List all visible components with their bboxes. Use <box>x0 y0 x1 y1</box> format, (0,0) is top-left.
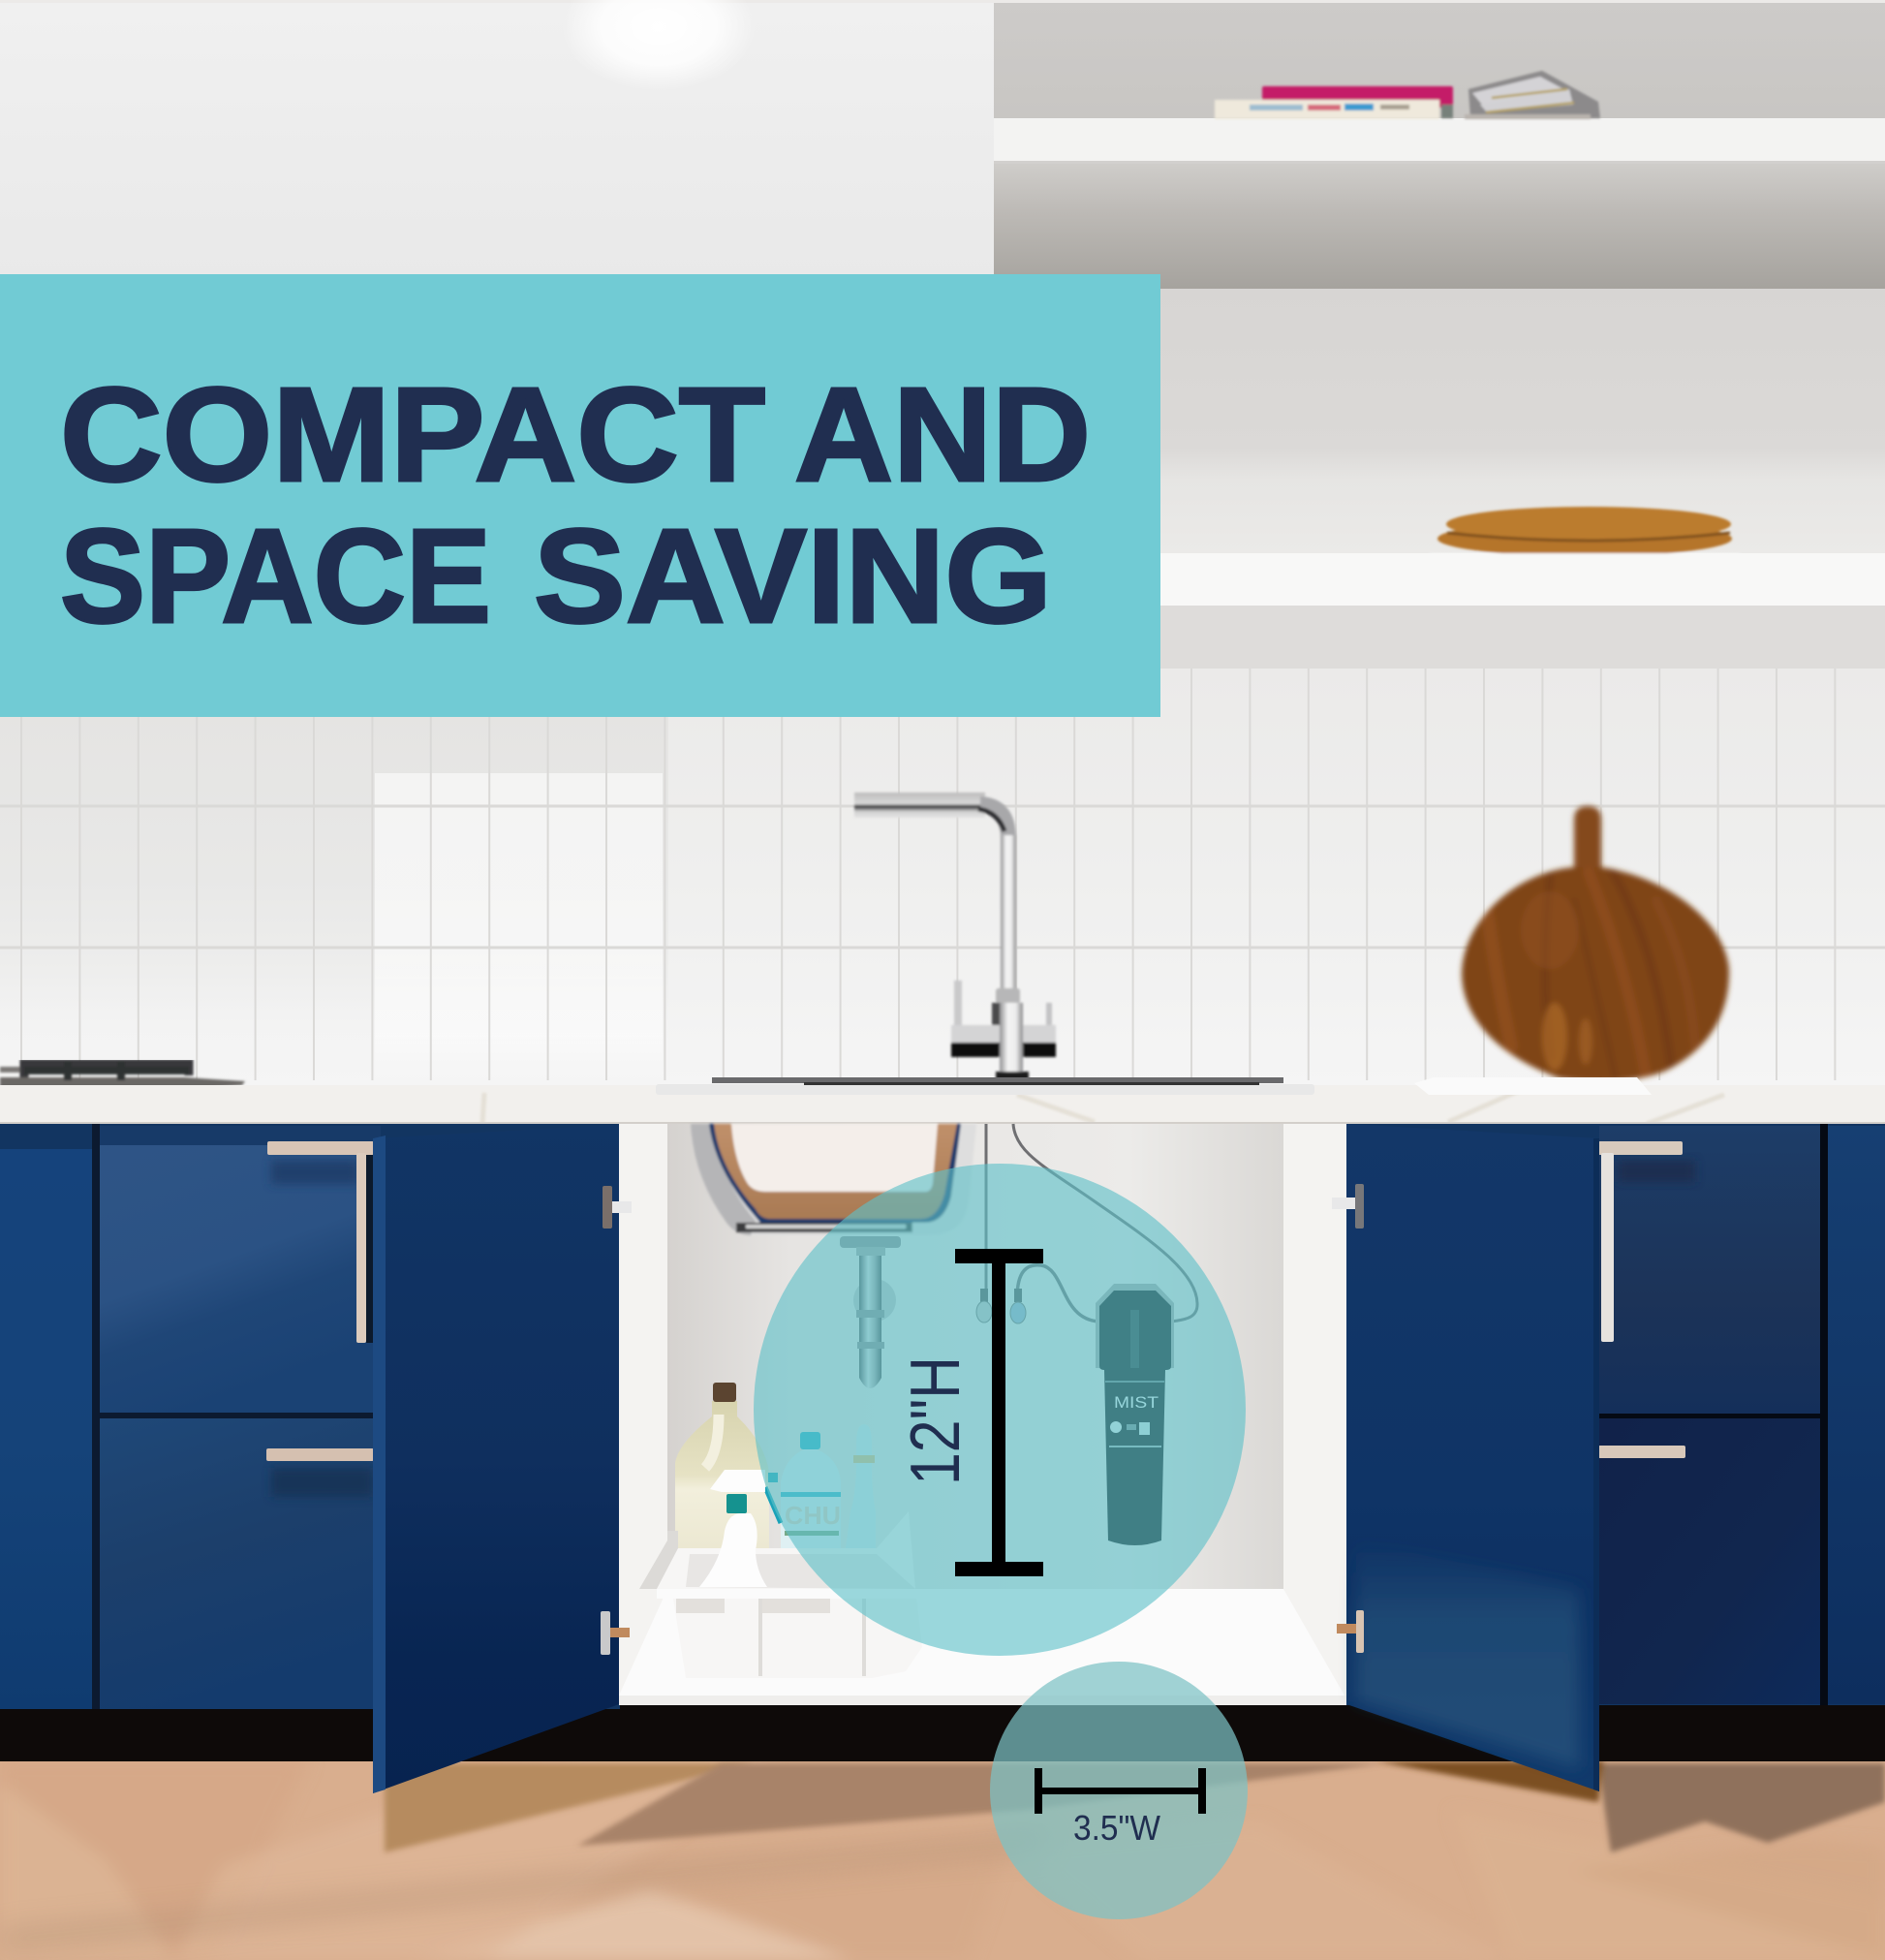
spray bottle <box>699 1470 767 1587</box>
tiled backsplash <box>0 669 1885 1087</box>
hinges <box>601 1184 1364 1655</box>
title: AND <box>794 360 1091 510</box>
width label: 3.5"W <box>1073 1808 1160 1848</box>
title <box>60 360 1091 651</box>
jug <box>675 1383 769 1548</box>
nozzle clip <box>765 1473 781 1523</box>
sink bowl <box>691 1124 976 1235</box>
left lower cabinets <box>0 1124 620 1709</box>
upper wall <box>0 0 1885 1090</box>
height bracket <box>955 1249 1043 1576</box>
door base shadow <box>1375 1761 1603 1802</box>
side shelf bracket <box>639 1531 678 1589</box>
water lines and valves <box>976 1124 1197 1323</box>
bottle: CHU <box>785 1501 841 1530</box>
bottle <box>781 1432 841 1548</box>
width bracket <box>1035 1768 1206 1814</box>
cabinet interior <box>619 1124 1346 1705</box>
open shelving <box>994 3 1885 669</box>
sink rim <box>656 1077 1314 1095</box>
large measurement circle <box>754 1164 1246 1656</box>
thin bottle <box>846 1424 876 1548</box>
right door floor shadow <box>1598 1763 1885 1852</box>
left door floor shadow <box>385 1763 755 1852</box>
books on shelf <box>1215 71 1600 119</box>
stove <box>0 1062 245 1093</box>
floor <box>0 1725 1885 1960</box>
basket <box>657 1511 922 1678</box>
cleaning supplies <box>639 1383 922 1678</box>
filter brand text: MIST <box>1114 1393 1159 1412</box>
under-sink filter unit <box>1099 1291 1171 1545</box>
right lower cabinets <box>1346 1124 1885 1705</box>
countertop <box>0 1077 1885 1125</box>
right cabinet door <box>1346 1124 1599 1791</box>
faucet <box>854 793 1056 1079</box>
cutting board <box>1462 806 1729 1081</box>
wooden plates on shelf <box>1430 507 1740 559</box>
filter mounting bracket <box>1096 1284 1174 1368</box>
left drawer handles <box>266 1141 374 1461</box>
title banner <box>0 274 1160 717</box>
drain pipe <box>840 1236 901 1388</box>
small measurement circle <box>990 1662 1248 1919</box>
title: COMPACT <box>60 360 765 510</box>
height label: 12"H <box>897 1356 974 1485</box>
diagonal floor shadow <box>0 1841 1046 1941</box>
left cabinet door <box>373 1125 619 1793</box>
title: SAVING <box>534 502 1052 651</box>
right drawer handles <box>1598 1141 1685 1458</box>
centre floor shadow <box>577 1763 1385 1846</box>
toe kick <box>0 1705 1885 1761</box>
title: SPACE <box>60 502 491 651</box>
